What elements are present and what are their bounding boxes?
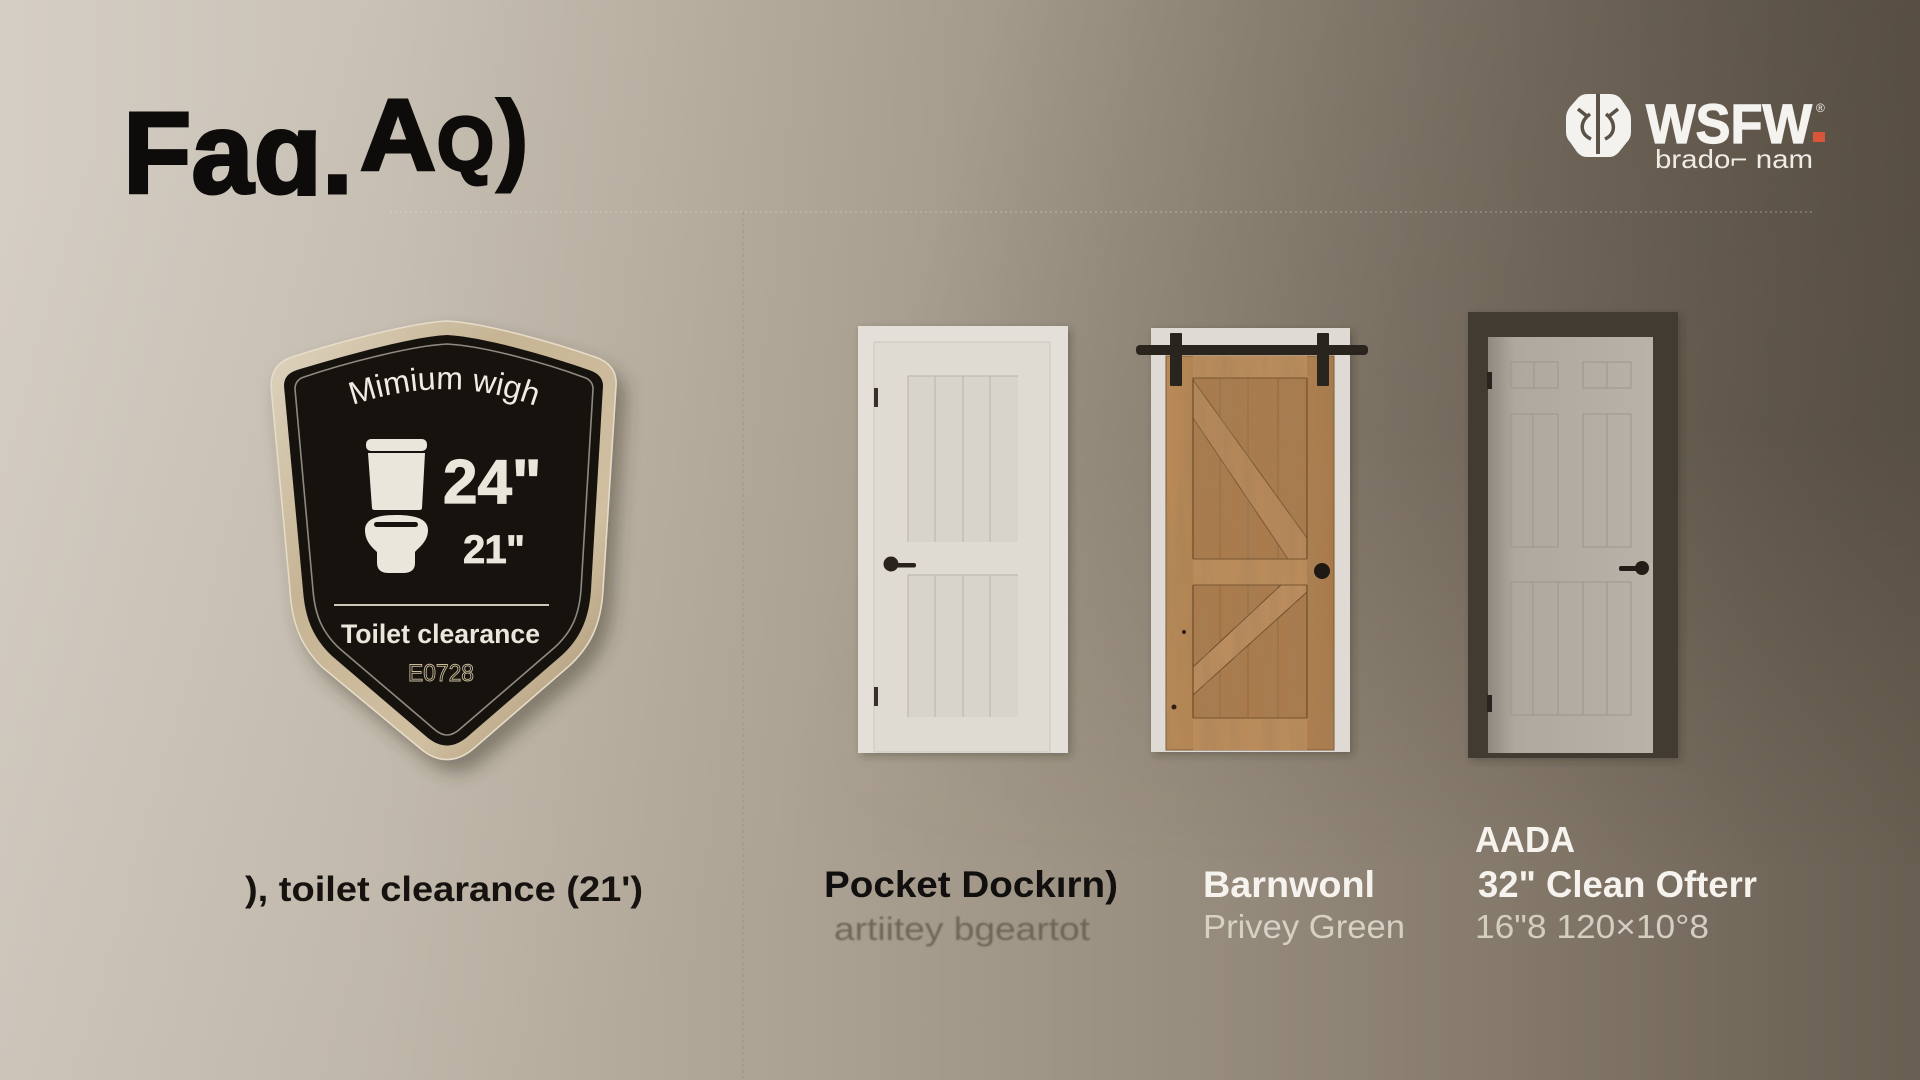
- door frame: [858, 326, 1068, 753]
- measurement 21: 21": [463, 528, 525, 572]
- badge heading: [348, 368, 538, 406]
- ADA dimensions: 16"8 120×10°8: [1475, 908, 1709, 945]
- door hinges: [874, 388, 878, 706]
- title: Faq.: [123, 88, 353, 218]
- badge divider: [334, 604, 549, 606]
- ADA heading: 32" Clean Ofterr: [1478, 864, 1757, 905]
- title: ): [497, 81, 528, 193]
- badge label: Toilet clearance: [341, 619, 540, 649]
- wooden door: [1166, 356, 1334, 750]
- measurement 24: 24": [443, 448, 541, 517]
- barn door sublabel: Privey Green: [1203, 908, 1405, 945]
- shield black face: [284, 335, 603, 746]
- barn door heading: Barnwonl: [1203, 864, 1375, 905]
- logo tagline: brado⌐ nam: [1655, 144, 1813, 174]
- red square accent: [1813, 132, 1825, 142]
- barn rail and straps: [1136, 333, 1368, 386]
- brand logo: [1566, 92, 1825, 174]
- door leaf: [1488, 337, 1653, 753]
- shield inner line: [295, 344, 593, 735]
- door handle: [1619, 561, 1649, 575]
- pocket door sublabel: artiitey bgeartot: [834, 911, 1090, 947]
- door: pocket door: [858, 326, 1068, 753]
- caption: barn door: [1203, 864, 1405, 945]
- caption: pocket door: [824, 864, 1118, 947]
- dark door frame: [1468, 312, 1678, 758]
- registered mark: ®: [1816, 101, 1825, 115]
- door handle: [884, 556, 916, 572]
- pocket door heading: Pocket Dockırn): [824, 864, 1118, 905]
- badge heading: Mimium wigh: [348, 368, 538, 406]
- shield frame: [271, 321, 616, 760]
- title: Q: [437, 102, 494, 187]
- door knob: [1314, 563, 1330, 579]
- caption: toilet clearance: ), toilet clearance (21'): [245, 870, 643, 909]
- door: barn door: [1136, 328, 1368, 752]
- badge code: E0728: [408, 660, 474, 687]
- panel: shield badge: [268, 320, 636, 782]
- white backing frame: [1151, 328, 1350, 752]
- ADA label: AADA: [1475, 819, 1575, 860]
- door hinges: [1487, 372, 1492, 712]
- door: ADA door: [1468, 312, 1678, 758]
- icon: toilet: [365, 439, 428, 573]
- caption: ADA door: [1475, 819, 1757, 945]
- title: A: [360, 80, 436, 192]
- title: [129, 97, 525, 196]
- icon: logo emblem: [1566, 94, 1631, 157]
- door leaf: [874, 342, 1050, 752]
- logo wordmark: WSFW: [1646, 92, 1812, 155]
